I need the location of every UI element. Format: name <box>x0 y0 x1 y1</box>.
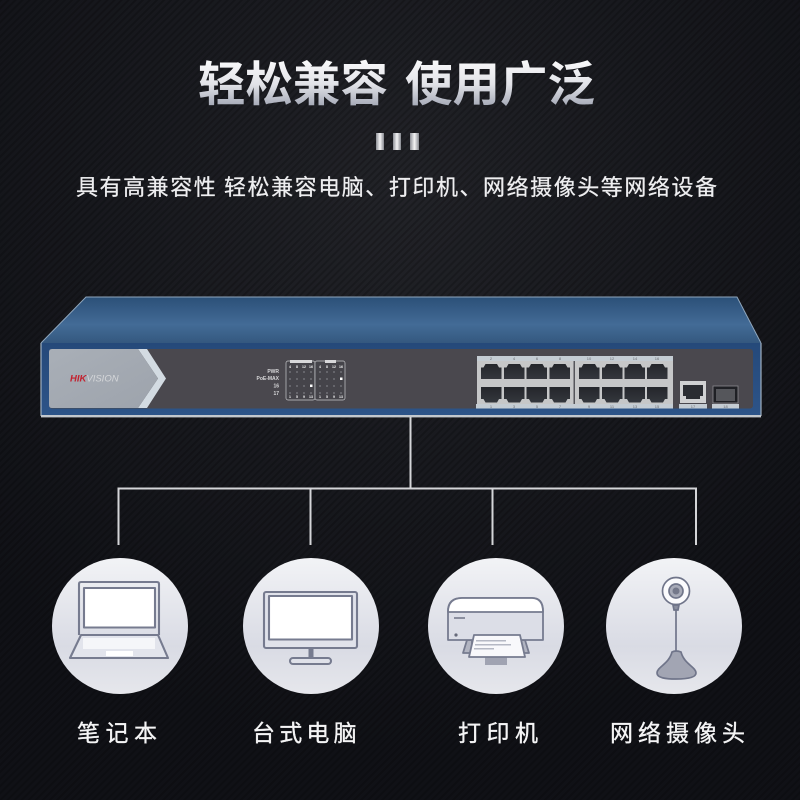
switch front panel <box>41 343 761 416</box>
title: 轻松兼容 <box>198 59 388 112</box>
brand plate <box>49 349 166 408</box>
ethernet port block: 8 <box>559 356 562 361</box>
SFP port 18: 18 <box>723 404 728 409</box>
status LED panel: 13 <box>309 395 313 399</box>
device: printer <box>428 558 564 694</box>
device: laptop <box>52 558 188 694</box>
status LED panel: 5 <box>326 395 328 399</box>
uplink port 17 <box>679 381 707 409</box>
status LED panel: 4 <box>289 365 291 369</box>
status LED panel: 1 <box>289 395 291 399</box>
status LED panel: 5 <box>296 395 298 399</box>
laptop icon <box>70 582 168 658</box>
status labels: 17 <box>273 391 279 397</box>
ethernet port block <box>476 356 673 409</box>
status LED panel: 12 <box>302 365 306 369</box>
webcam icon <box>657 578 696 679</box>
status LED panel: 16 <box>339 365 343 369</box>
printer circle <box>428 558 564 694</box>
ethernet port block: 12 <box>610 356 615 361</box>
label: webcam: 网络摄像头 <box>610 720 750 746</box>
network switch <box>41 297 761 417</box>
subtitle: 具有高兼容性 <box>76 175 217 200</box>
label: desktop computer: 台式电脑 <box>252 720 361 746</box>
label: printer: 打印机 <box>458 720 544 746</box>
ethernet port block: 2 <box>490 356 493 361</box>
status LED panel: 9 <box>333 395 335 399</box>
ethernet port block: 5 <box>536 404 539 409</box>
status LED panel: 1 <box>319 395 321 399</box>
ethernet port block: 11 <box>610 404 615 409</box>
uplink port 17: 17 <box>691 404 696 409</box>
status LED panel: 9 <box>303 395 305 399</box>
status LED panel: 13 <box>339 395 343 399</box>
device: desktop computer <box>243 558 379 694</box>
laptop circle <box>52 558 188 694</box>
ethernet port block: 1 <box>490 404 493 409</box>
label: laptop: 笔记本 <box>77 720 162 746</box>
switch side edges <box>41 343 761 416</box>
status labels <box>256 369 280 397</box>
status LED panel <box>286 360 345 400</box>
desktop monitor icon <box>264 592 357 664</box>
status LED panel: 16 <box>309 365 313 369</box>
device: webcam <box>606 558 742 694</box>
ethernet port block: 6 <box>536 356 539 361</box>
printer icon <box>448 598 543 665</box>
status labels: PoE-MAX <box>256 376 280 382</box>
ethernet port block: 3 <box>513 404 516 409</box>
switch bottom edge <box>41 415 761 417</box>
connector lines <box>118 417 696 545</box>
switch top edge highlight <box>41 297 761 343</box>
subtitle: 轻松兼容电脑、打印机、网络摄像头等网络设备 <box>224 175 719 200</box>
status LED panel: 12 <box>332 365 336 369</box>
status LED panel: 4 <box>319 365 321 369</box>
status LED panel: 8 <box>326 365 328 369</box>
ethernet port block: 15 <box>655 404 660 409</box>
brand logo: HIKVISION <box>70 374 119 384</box>
front panel dark face <box>49 349 753 408</box>
status labels: PWR <box>267 369 279 375</box>
ethernet port block: 13 <box>633 404 638 409</box>
ethernet port block: 7 <box>559 404 562 409</box>
switch top cover <box>41 297 761 343</box>
status LED panel: 8 <box>296 365 298 369</box>
ethernet port block: 9 <box>588 404 591 409</box>
ethernet port block: 14 <box>633 356 638 361</box>
SFP port 18 <box>712 386 739 409</box>
desktop circle <box>243 558 379 694</box>
webcam circle <box>606 558 742 694</box>
ethernet port block: 16 <box>655 356 660 361</box>
decorative three bars <box>376 133 419 150</box>
ethernet port block: 10 <box>587 356 592 361</box>
title: 使用广泛 <box>405 59 595 112</box>
ethernet port block: 4 <box>513 356 516 361</box>
status labels: 16 <box>273 384 279 390</box>
